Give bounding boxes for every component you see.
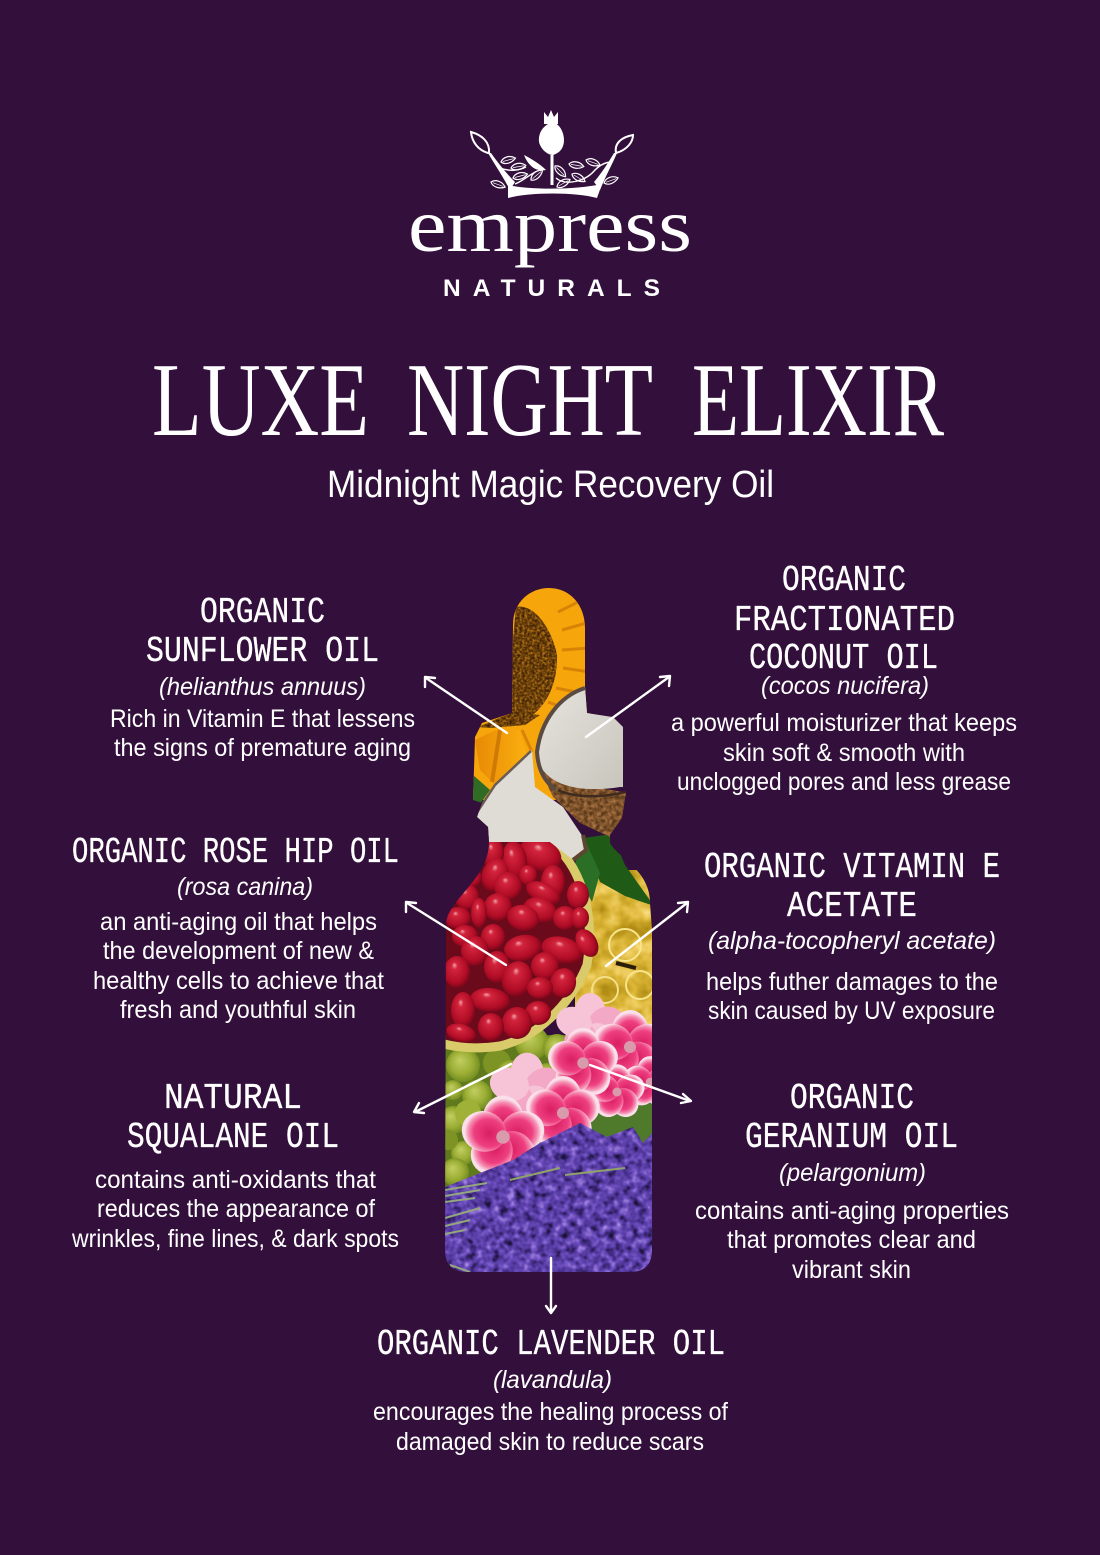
panel: vitamin E acetate [704, 847, 1000, 1025]
arrow: squalane [414, 1064, 511, 1113]
panel: geranium oil: GERANIUM OIL [745, 1117, 958, 1158]
wordmark: naturals: NATURALS [443, 275, 660, 302]
panel: lavender oil [373, 1324, 728, 1456]
panel: lavender oil: encourages the healing process of [373, 1398, 728, 1426]
panel: coconut oil: FRACTIONATED [734, 600, 955, 641]
panel: squalane oil [71, 1078, 399, 1253]
panel: sunflower oil: Rich in Vitamin E that lessens [110, 705, 415, 733]
panel: rose hip oil: (rosa canina) [177, 873, 313, 901]
panel: sunflower oil: (helianthus annuus) [159, 673, 366, 701]
panel: vitamin E acetate: helps futher damages to the [706, 968, 998, 996]
wordmark: empress: empress [408, 184, 692, 268]
olives [445, 1030, 566, 1195]
panel: coconut oil: (cocos nucifera) [761, 672, 929, 700]
panel: coconut oil: ORGANIC [782, 560, 906, 601]
panel: squalane oil: contains anti-oxidants that [95, 1166, 376, 1194]
panel: rose hip oil: fresh and youthful skin [120, 996, 356, 1024]
panel: vitamin E acetate: skin caused by UV exposure [708, 997, 995, 1025]
icon: rose bud crown [471, 110, 633, 198]
arrow: sunflower [425, 677, 507, 733]
vitamin E capsules [575, 870, 652, 1024]
bowl of rose hips [444, 832, 603, 1048]
bottle filled with ingredients [438, 585, 679, 1275]
panel: lavender oil: ORGANIC LAVENDER OIL [377, 1324, 725, 1365]
panel: coconut oil: skin soft & smooth with [723, 739, 965, 767]
arrow: coconut [586, 676, 670, 737]
panel: vitamin E acetate: (alpha-tocopheryl acetate) [708, 927, 996, 955]
panel: coconut oil: unclogged pores and less grease [677, 768, 1011, 796]
panel: sunflower oil [110, 592, 415, 762]
panel: sunflower oil: ORGANIC [200, 592, 325, 633]
panel: geranium oil: that promotes clear and [727, 1226, 976, 1254]
green leaves [575, 834, 654, 906]
arrow: rose hip [406, 902, 506, 965]
arrow: lavender [546, 1258, 556, 1313]
panel: squalane oil: reduces the appearance of [97, 1195, 375, 1223]
panel: squalane oil: SQUALANE OIL [127, 1117, 339, 1158]
panel: geranium oil: ORGANIC [790, 1078, 914, 1119]
panel: rose hip oil: healthy cells to achieve that [93, 967, 384, 995]
panel: lavender oil: damaged skin to reduce scars [396, 1428, 704, 1456]
coconut halves [477, 686, 628, 860]
panel: vitamin E acetate: ACETATE [787, 886, 917, 927]
panel: geranium oil: (pelargonium) [779, 1159, 926, 1187]
title [152, 341, 944, 458]
panel: lavender oil: (lavandula) [493, 1366, 612, 1394]
panel: geranium oil: contains anti-aging properties [695, 1197, 1009, 1225]
title: LUXE [152, 341, 369, 458]
logo: empress naturals [408, 110, 692, 302]
panel: rose hip oil: an anti-aging oil that helps [100, 908, 377, 936]
panel: sunflower oil: SUNFLOWER OIL [146, 631, 379, 672]
lavender [444, 1123, 655, 1275]
panel: vitamin E acetate: ORGANIC VITAMIN E [704, 847, 1000, 888]
leaf under sunflower [473, 776, 490, 803]
panel: sunflower oil: the signs of premature aging [114, 734, 411, 762]
panel: coconut oil: COCONUT OIL [749, 638, 938, 679]
panel: rose hip oil [72, 832, 399, 1024]
subtitle: Midnight Magic Recovery Oil [327, 464, 774, 506]
panel: geranium oil: vibrant skin [792, 1256, 911, 1284]
panel: coconut oil [671, 560, 1017, 796]
panel: coconut oil: a powerful moisturizer that keeps [671, 709, 1017, 737]
panel: rose hip oil: the development of new & [103, 937, 374, 965]
panel: rose hip oil: ORGANIC ROSE HIP OIL [72, 832, 399, 873]
sunflower [470, 585, 590, 800]
arrow: vitamin E [606, 902, 688, 966]
panel: geranium oil [695, 1078, 1009, 1284]
title: NIGHT [407, 341, 653, 458]
panel: squalane oil: wrinkles, fine lines, & dark spots [71, 1225, 399, 1253]
title: ELIXIR [692, 341, 944, 458]
panel: squalane oil: NATURAL [164, 1078, 302, 1119]
arrow: geranium [590, 1065, 691, 1103]
geranium flowers [462, 993, 652, 1172]
